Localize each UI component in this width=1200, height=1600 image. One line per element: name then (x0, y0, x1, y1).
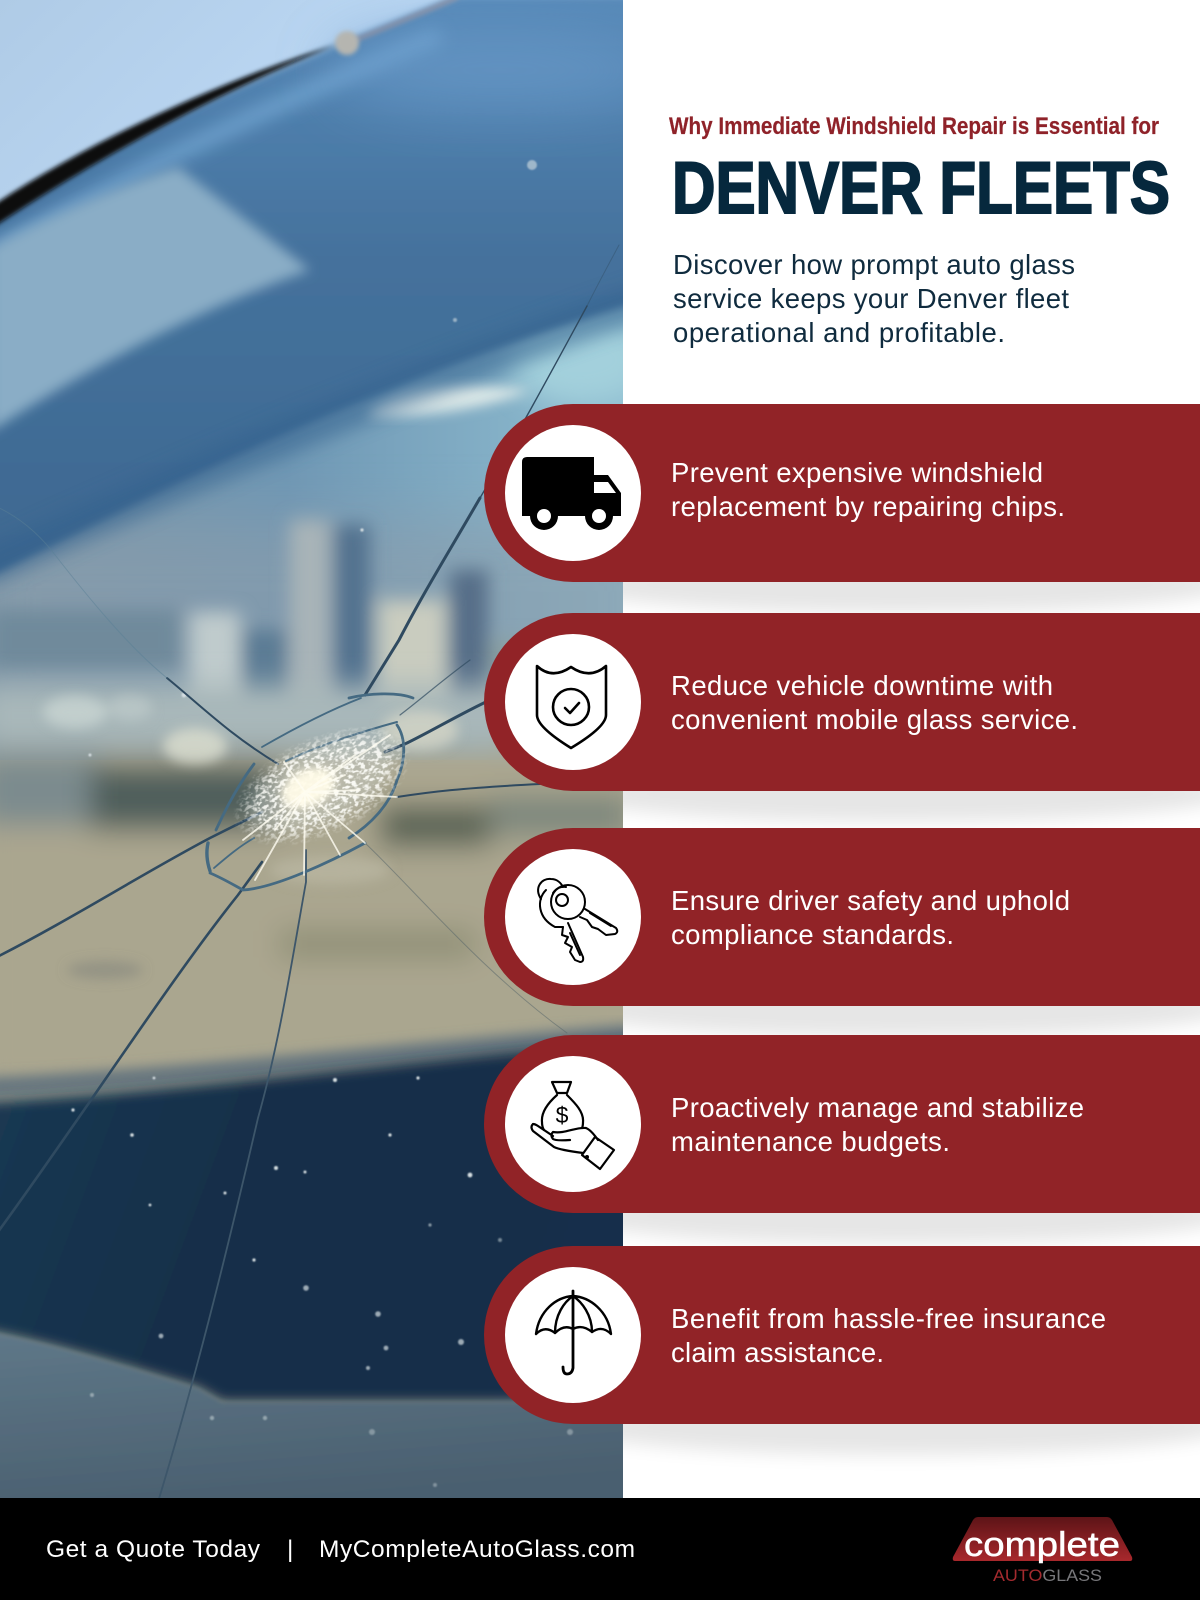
benefit text (671, 1303, 1106, 1368)
icon: shield with check (537, 666, 606, 748)
intro text: service keeps your Denver fleet (673, 283, 1069, 314)
benefit text: replacement by repairing chips. (671, 491, 1065, 522)
benefit text: claim assistance. (671, 1337, 884, 1368)
benefit text (671, 885, 1070, 950)
call to action (46, 1536, 635, 1563)
intro text: Discover how prompt auto glass (673, 249, 1075, 280)
footer bar (0, 1498, 1200, 1600)
benefit text: Prevent expensive windshield (671, 457, 1043, 488)
benefit text: Proactively manage and stabilize (671, 1092, 1084, 1123)
title block (669, 113, 1170, 348)
benefit text: maintenance budgets. (671, 1126, 950, 1157)
pill shadows on white column (623, 582, 1200, 1458)
intro text (673, 249, 1075, 348)
call to action: MyCompleteAutoGlass.com (319, 1536, 635, 1563)
benefit text (671, 1092, 1084, 1157)
icon: money bag in hand (532, 1082, 614, 1169)
call to action: Get a Quote Today (46, 1536, 261, 1563)
background photo: cracked windshield (0, 0, 670, 1510)
intro text: operational and profitable. (673, 317, 1005, 348)
grey haze over the skyline (1, 517, 623, 682)
benefit text: Benefit from hassle-free insurance (671, 1303, 1106, 1334)
panel: insurance claims (484, 1246, 1200, 1424)
logo: Complete Auto Glass: AUTOGLASS (993, 1566, 1102, 1585)
impact point (234, 727, 408, 881)
panel: driver safety (484, 828, 1200, 1006)
panel: reduce downtime (484, 613, 1200, 791)
benefit text: Reduce vehicle downtime with (671, 670, 1053, 701)
call to action: | (287, 1536, 293, 1563)
blurred Denver skyline (0, 512, 509, 702)
benefit text (671, 457, 1065, 522)
glass specks (71, 160, 573, 1487)
reflection and skyline glow (508, 325, 623, 406)
icon: umbrella (536, 1291, 611, 1374)
logo: Complete Auto Glass (953, 1517, 1132, 1585)
benefit text: convenient mobile glass service. (671, 704, 1078, 735)
icon: delivery truck (522, 457, 621, 530)
wiper blade (0, 0, 458, 226)
panel: maintenance budgets (484, 1035, 1200, 1213)
icon: money bag in hand: $ (556, 1102, 569, 1128)
icon: keys (538, 879, 617, 962)
windshield cracks (0, 245, 619, 1502)
benefit text: compliance standards. (671, 919, 954, 950)
logo: Complete Auto Glass: complete (964, 1526, 1120, 1564)
benefit text (671, 670, 1078, 735)
panel: prevent replacement (484, 404, 1200, 582)
benefit text: Ensure driver safety and uphold (671, 885, 1070, 916)
